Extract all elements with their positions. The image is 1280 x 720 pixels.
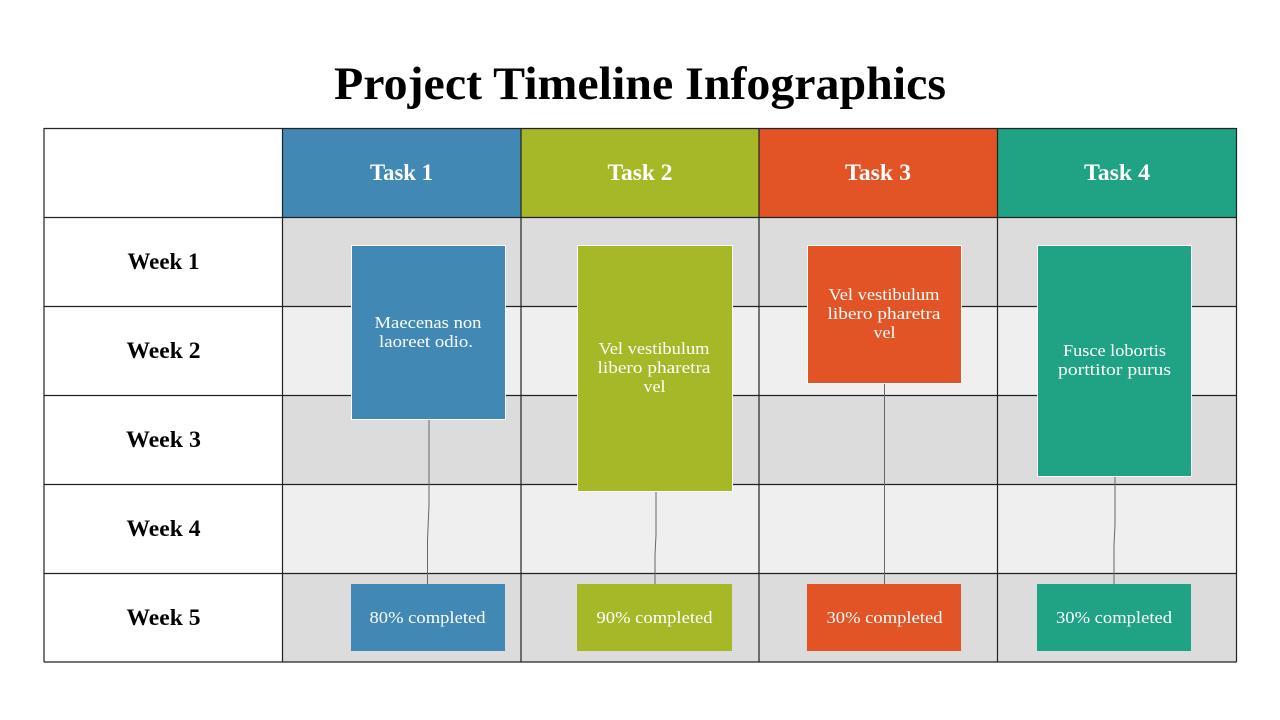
table row shading [282, 217, 1236, 662]
week 5 label: Week 5 [126, 605, 200, 630]
connector: task 3 [884, 383, 886, 584]
status: task 1 [351, 584, 505, 651]
status: task 3 [807, 584, 961, 651]
task 3 card [808, 246, 962, 384]
task 3 heading: Task 3 [845, 160, 911, 185]
task 3 card: vel [874, 323, 896, 342]
status: task 2 [577, 584, 732, 651]
week 4 label: Week 4 [126, 516, 201, 541]
title: Project Timeline Infographics [334, 58, 946, 110]
task 3 card: libero pharetra [828, 304, 941, 323]
task 2 card [578, 246, 732, 492]
status: task 4: 30% completed [1056, 608, 1173, 627]
week 2 label: Week 2 [126, 338, 200, 363]
connector: task 2 [655, 491, 656, 584]
task 1 card [352, 246, 506, 420]
task 4 card: porttitor purus [1058, 360, 1171, 379]
connector: task 1 [428, 420, 429, 584]
task 3 card: Vel vestibulum [828, 285, 940, 304]
task 2 card: Vel vestibulum [598, 339, 710, 358]
timeline table [44, 128, 1236, 662]
task 4 card [1038, 246, 1192, 476]
status: task 1: 80% completed [370, 608, 486, 627]
status: task 2: 90% completed [596, 608, 713, 627]
status: task 4 [1037, 584, 1191, 651]
task 1 card: Maecenas non [374, 313, 482, 332]
week 1 label: Week 1 [128, 249, 200, 274]
task 2 card: vel [644, 377, 666, 396]
status: task 3: 30% completed [826, 608, 943, 627]
week 3 label: Week 3 [126, 427, 201, 452]
task 2 card: libero pharetra [598, 358, 711, 377]
task header cells [282, 128, 1236, 217]
connector: task 4 [1114, 476, 1115, 584]
task 4 card: Fusce lobortis [1063, 341, 1166, 360]
task 1 card: laoreet odio. [379, 332, 473, 351]
task 1 heading: Task 1 [370, 160, 433, 185]
task 4 heading: Task 4 [1084, 160, 1151, 185]
task 2 heading: Task 2 [608, 160, 672, 185]
